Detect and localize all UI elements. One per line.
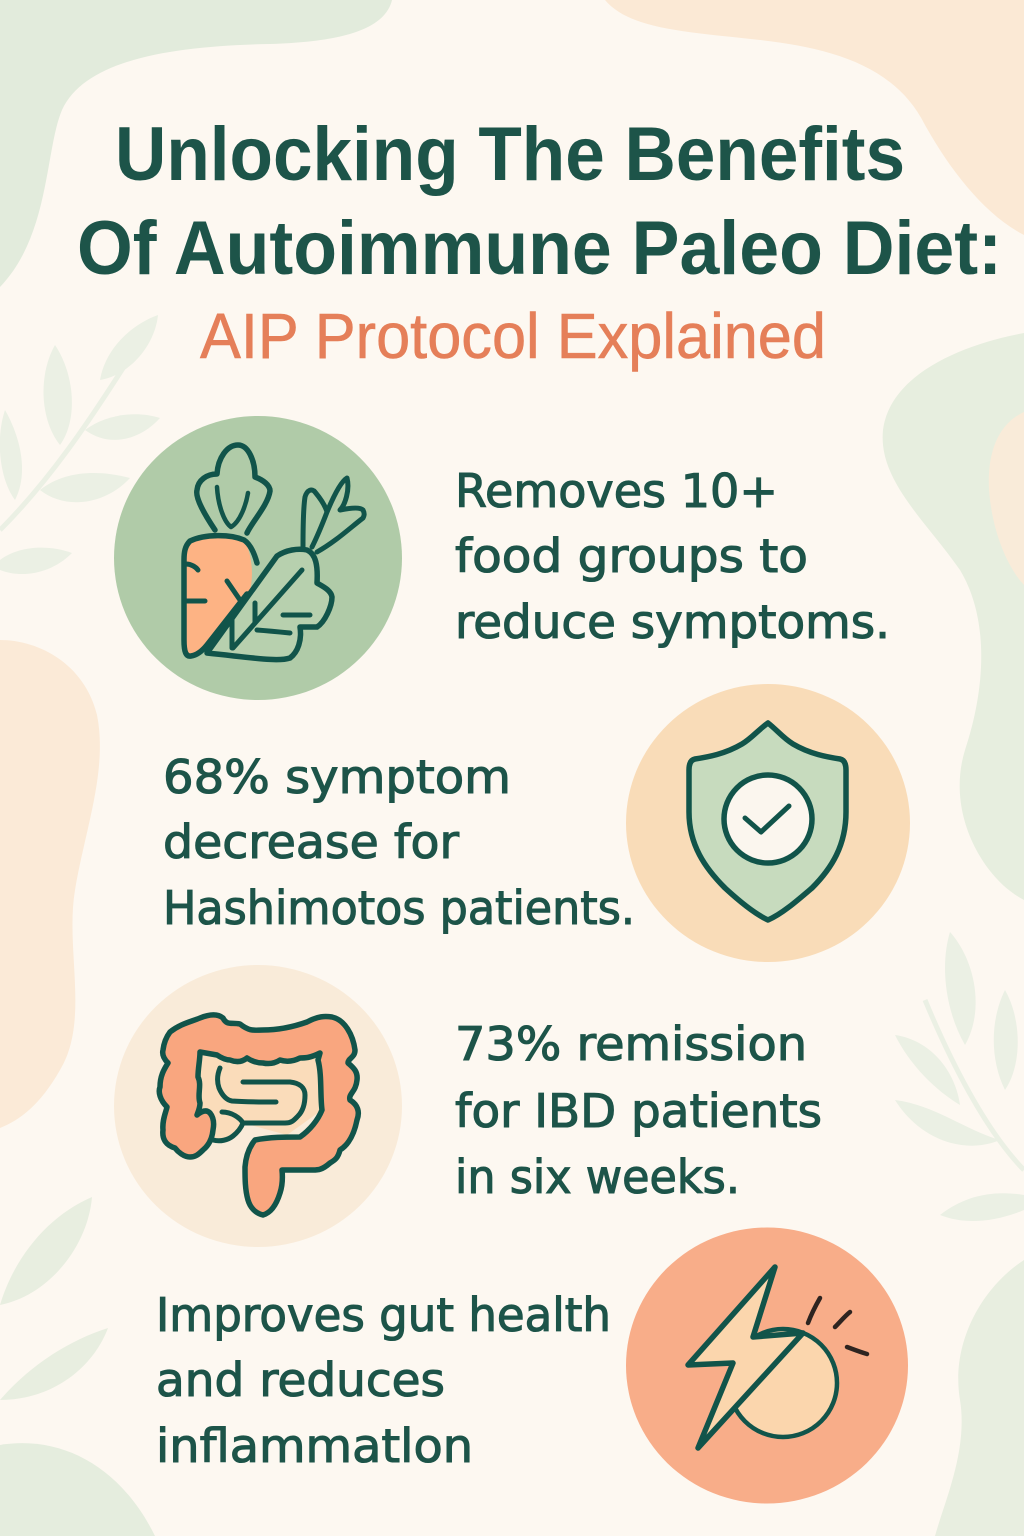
text: symptom decrease: decrease for — [163, 815, 459, 869]
text: remission: in six weeks. — [455, 1150, 740, 1204]
panel: item 1 food groups — [114, 416, 890, 700]
decorative leaves: lower left sprig — [0, 1197, 108, 1400]
background blob: top right peach — [605, 0, 1024, 235]
text: symptom decrease — [163, 750, 635, 935]
icon: shield with check — [626, 684, 910, 962]
text: remission: 73% remission — [455, 1017, 807, 1071]
panel: item 4 gut health — [156, 1228, 908, 1504]
background blob: right inner peach — [989, 412, 1024, 585]
text: remission: for IBD patients — [455, 1084, 822, 1138]
icon: carrot and leafy vegetable — [114, 416, 402, 700]
text: symptom decrease: Hashimotos patients. — [163, 881, 635, 935]
icon: intestines — [114, 965, 402, 1247]
title line 1: Unlocking The Benefits — [115, 112, 905, 197]
text: improves gut health: and reduces — [156, 1353, 445, 1407]
text: removes food groups: food groups to — [455, 529, 808, 583]
decorative leaves: left sprig — [0, 315, 160, 574]
title — [77, 112, 1002, 291]
background blob: top left green — [0, 0, 392, 287]
icon: lightning bolt and inflamed circle — [626, 1228, 908, 1504]
text: improves gut health: inflammatlon — [156, 1419, 473, 1473]
subtitle: AIP Protocol Explained — [200, 300, 826, 372]
text: removes food groups: reduce symptoms. — [455, 595, 890, 649]
background blob: bottom right green — [935, 1260, 1024, 1536]
panel: item 3 IBD — [114, 965, 822, 1247]
text: remission — [455, 1017, 822, 1204]
text: removes food groups: Removes 10+ — [455, 464, 778, 518]
background blob: left peach — [0, 640, 100, 1128]
text: improves gut health: Improves gut health — [156, 1288, 611, 1342]
text: removes food groups — [455, 464, 890, 649]
text: improves gut health — [156, 1288, 611, 1473]
text: symptom decrease: 68% symptom — [163, 750, 511, 804]
background blob: right green — [883, 333, 1024, 900]
decorative leaves: right sprig — [895, 932, 1024, 1221]
background blob: bottom left green — [0, 1443, 155, 1536]
panel: item 2 Hashimotos — [163, 684, 910, 962]
